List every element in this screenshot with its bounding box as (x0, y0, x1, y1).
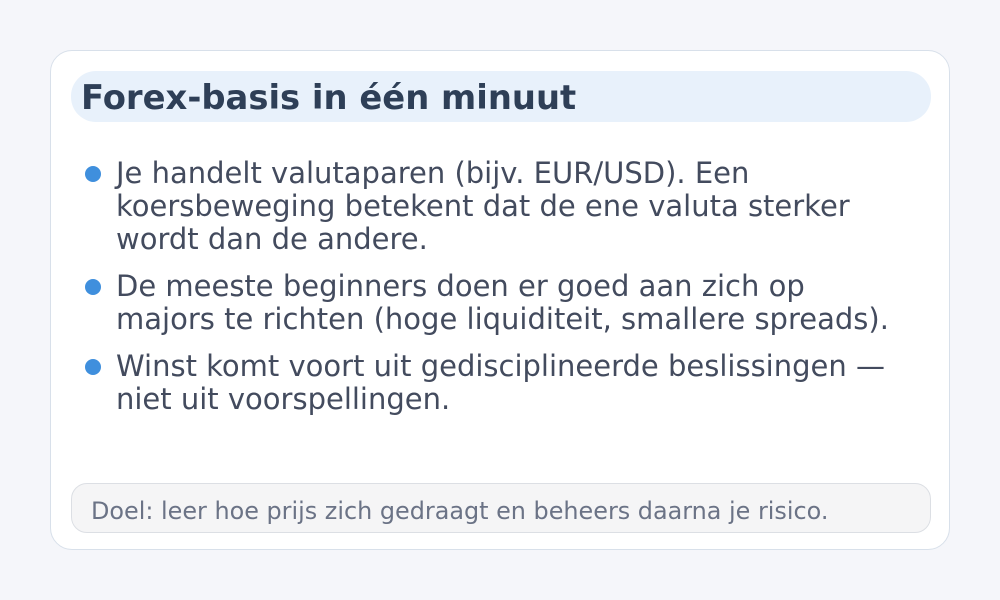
heading: Forex-basis in één minuut (81, 78, 576, 117)
bullet list (85, 156, 889, 416)
bullet 3: Winst komt voort uit gedisciplineerde beslissingen — niet uit voorspellingen. (116, 349, 885, 416)
card panel (50, 50, 950, 550)
title bar (71, 71, 931, 122)
bullet 1: Je handelt valutaparen (bijv. EUR/USD). Een koersbeweging betekent dat de ene valuta sterker wordt dan de andere. (116, 156, 850, 256)
footer note: Doel: leer hoe prijs zich gedraagt en beheers daarna je risico. (91, 497, 828, 525)
footer note (71, 483, 931, 533)
bullet 2: De meeste beginners doen er goed aan zich op majors te richten (hoge liquiditeit, smallere spreads). (116, 269, 889, 336)
